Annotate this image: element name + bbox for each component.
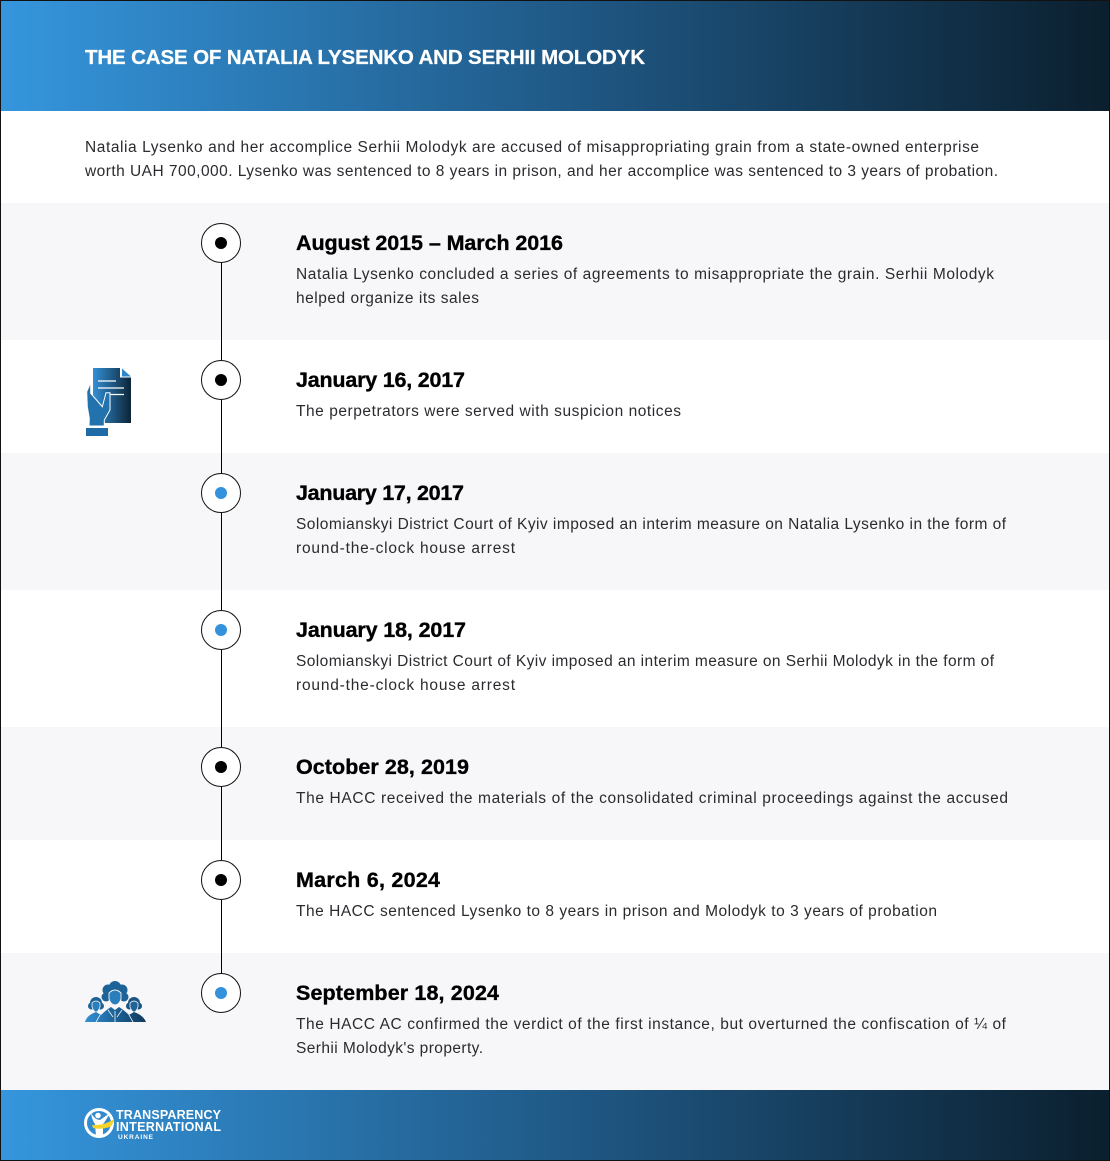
intro text (84, 139, 998, 180)
event: October 28, 2019 (202, 748, 1008, 807)
logo: Transparency International Ukraine: INTERNATIONAL (116, 1120, 221, 1134)
intro text: Natalia Lysenko and her accomplice Serhii Molodyk are accused of misappropriating grain from a state-owned enterprise (85, 139, 979, 156)
event: September 18, 2024: Serhii Molodyk's property. (296, 1040, 483, 1057)
event: October 28, 2019: October 28, 2019 (296, 755, 469, 779)
event: January 17, 2017: Solomianskyi District Court of Kyiv imposed an interim measure on Natalia Lysenko in the form of (296, 516, 1007, 533)
event: January 18, 2017: round-the-clock house arrest (296, 677, 516, 694)
event: January 18, 2017: January 18, 2017 (296, 618, 466, 642)
timeline line (221, 243, 222, 993)
event: January 16, 2017 (202, 360, 681, 420)
intro text: worth UAH 700,000. Lysenko was sentenced to 8 years in prison, and her accomplice was sentenced to 3 years of probation. (84, 163, 998, 180)
footer banner (1, 1090, 1109, 1160)
title: THE CASE OF NATALIA LYSENKO AND SERHII MOLODYK (85, 46, 645, 69)
event: September 18, 2024: September 18, 2024 (296, 981, 499, 1005)
event: August 2015 – March 2016 (202, 224, 994, 307)
event: January 16, 2017: January 16, 2017 (296, 368, 465, 392)
event: January 18, 2017 (202, 610, 995, 694)
logo: Transparency International Ukraine: UKRAINE (118, 1134, 154, 1141)
logo: Transparency International Ukraine (86, 1108, 222, 1141)
event: August 2015 – March 2016: helped organize its sales (296, 290, 479, 307)
icon: group of people (85, 981, 146, 1022)
icon: document in hand (86, 368, 131, 436)
logo: Transparency International Ukraine: TRANSPARENCY (116, 1108, 222, 1122)
row backgrounds (1, 203, 1109, 1090)
event: January 17, 2017: round-the-clock house arrest (296, 540, 516, 557)
event: March 6, 2024 (202, 860, 937, 920)
event: August 2015 – March 2016: Natalia Lysenko concluded a series of agreements to misappropriate the grain. Serhii Molodyk (296, 266, 994, 283)
header banner (1, 1, 1109, 111)
event: March 6, 2024: The HACC sentenced Lysenko to 8 years in prison and Molodyk to 3 years of probation (296, 903, 937, 920)
event: January 18, 2017: Solomianskyi District Court of Kyiv imposed an interim measure on Serhii Molodyk in the form of (296, 653, 995, 670)
event: September 18, 2024: The HACC AC confirmed the verdict of the first instance, but overturned the confiscation of ¼ of (296, 1016, 1007, 1033)
event: January 16, 2017: The perpetrators were served with suspicion notices (296, 403, 681, 420)
event: August 2015 – March 2016: August 2015 – March 2016 (296, 231, 563, 255)
event: January 17, 2017: January 17, 2017 (296, 481, 464, 505)
event: October 28, 2019: The HACC received the materials of the consolidated criminal proceedings against the accused (296, 790, 1008, 807)
event: January 17, 2017 (202, 474, 1007, 557)
event: March 6, 2024: March 6, 2024 (296, 868, 440, 892)
event: September 18, 2024 (202, 974, 1007, 1057)
